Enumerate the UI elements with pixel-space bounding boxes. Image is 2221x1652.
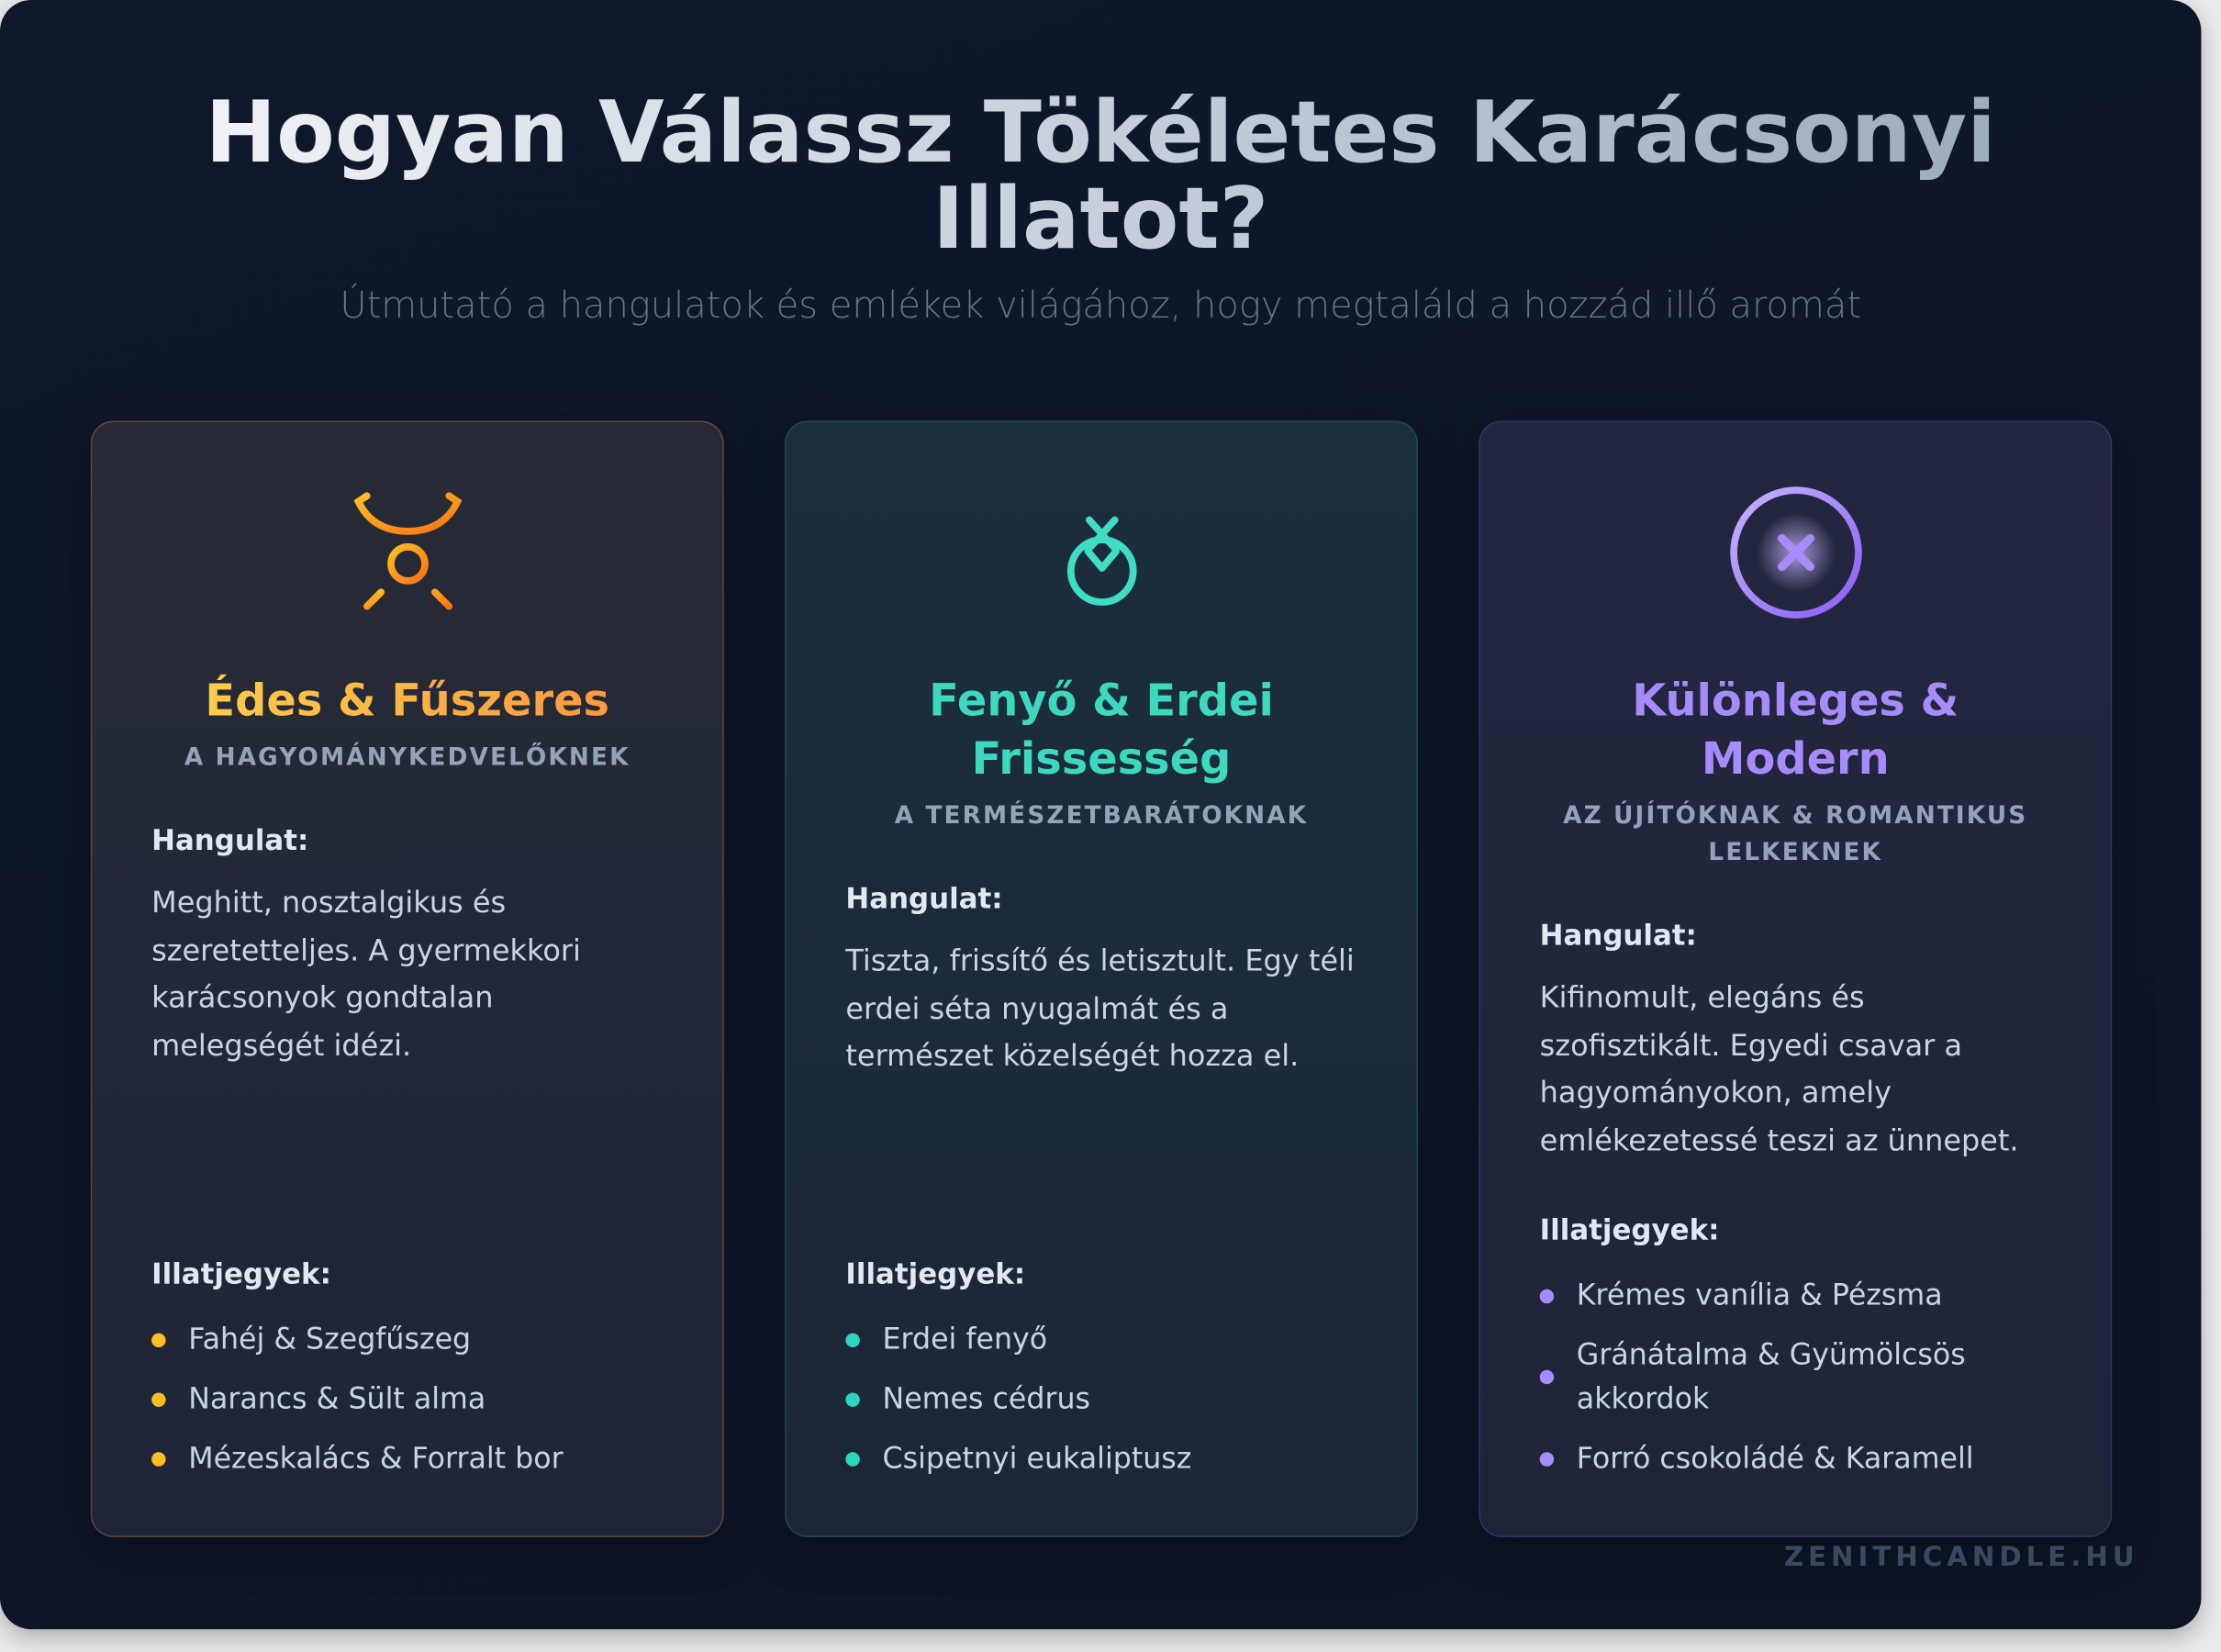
scent notes: Narancs & Sült alma: [188, 1381, 485, 1415]
mood: Hangulat:: [151, 823, 308, 857]
title: Illatot?: [932, 170, 1268, 269]
mood: Hangulat:: [845, 881, 1003, 915]
mood: [1540, 918, 2019, 1157]
heading: Frissesség: [972, 734, 1231, 785]
title: Hogyan Válassz Tökéletes Karácsonyi: [206, 84, 1996, 183]
mood: Tiszta, frissítő és letisztult. Egy téli erdei séta nyugalmát és a természet közelségét hozza el.: [845, 943, 1355, 1073]
scent notes: Nemes cédrus: [883, 1381, 1090, 1415]
scent notes: Fahéj & Szegfűszeg: [188, 1322, 471, 1356]
scent notes: Forró csokoládé & Karamell: [1577, 1441, 1974, 1475]
heading: [1632, 675, 1959, 785]
scent notes: Erdei fenyő: [883, 1322, 1047, 1356]
heading: Édes & Fűszeres: [205, 675, 609, 727]
title: [0, 91, 2201, 263]
heading: Fenyő & Erdei: [929, 675, 1274, 727]
mood: szofisztikált. Egyedi csavar a hagyományokon, amely: [1540, 1028, 1962, 1110]
scent notes: Mézeskalács & Forralt bor: [188, 1441, 564, 1475]
panel: special & modern: [1479, 420, 2112, 1537]
heading: Modern: [1702, 734, 1890, 785]
heading: Különleges &: [1632, 675, 1959, 727]
scent notes: Illatjegyek:: [845, 1256, 1025, 1290]
audience: A TERMÉSZETBARÁTOKNAK: [895, 802, 1308, 831]
icon: teal ornament: [1066, 516, 1137, 606]
scent notes: Gránátalma & Gyümölcsös akkordok: [1577, 1337, 1966, 1415]
audience: A HAGYOMÁNYKEDVELŐKNEK: [184, 743, 631, 772]
mood: Kifinomult, elegáns és: [1540, 980, 1865, 1014]
panel: sweet & spicy: [91, 420, 724, 1537]
mood: emlékezetessé teszi az ünnepet.: [1540, 1123, 2019, 1157]
subtitle: Útmutató a hangulatok és emlékek világához, hogy megtaláld a hozzád illő aromát: [340, 285, 1861, 328]
mood: Hangulat:: [1540, 918, 1697, 952]
scent notes: [1540, 1212, 1974, 1475]
footer brand: ZENITHCANDLE.HU: [1784, 1542, 2139, 1573]
heading: [151, 673, 663, 731]
scent notes: Illatjegyek:: [1540, 1212, 1719, 1246]
icon: orange figure: [354, 492, 463, 610]
panel: pine & forest: [785, 420, 1418, 1537]
scent notes: [845, 1256, 1191, 1475]
audience: AZ ÚJÍTÓKNAK & ROMANTIKUS LELKEKNEK: [1563, 802, 2027, 867]
scent notes: [151, 1256, 564, 1475]
mood: [845, 881, 1355, 1073]
mood: melegségét idézi.: [151, 1029, 411, 1063]
scent notes: Krémes vanília & Pézsma: [1577, 1278, 1943, 1312]
scent notes: Illatjegyek:: [151, 1256, 331, 1290]
mood: Meghitt, nosztalgikus és szeretetteljes. A gyermekkori karácsonyok gondtalan: [151, 886, 581, 1015]
scent notes: Csipetnyi eukaliptusz: [883, 1441, 1191, 1475]
heading: [929, 675, 1274, 785]
mood: [151, 823, 581, 1063]
icon: purple ring: [1730, 486, 1862, 619]
